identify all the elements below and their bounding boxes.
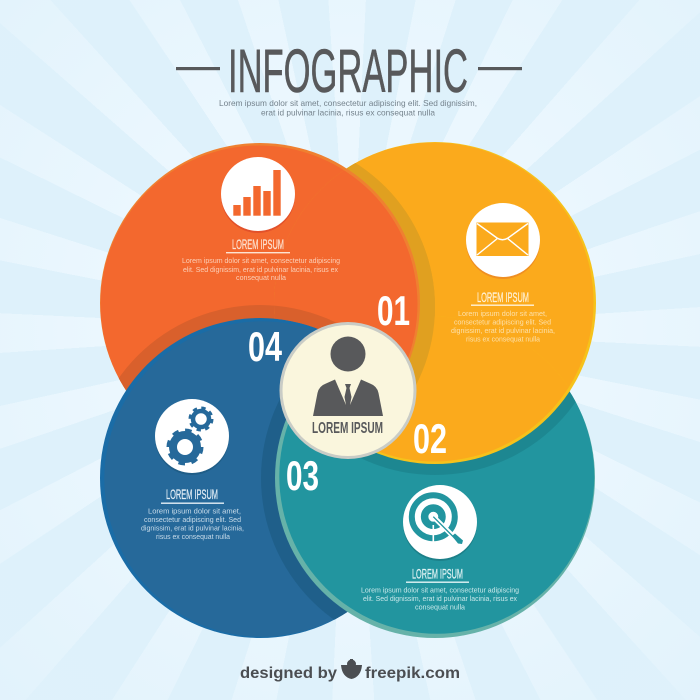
heading: LOREM IPSUM xyxy=(477,289,529,305)
icon: bar chart xyxy=(221,157,295,233)
body text: Lorem ipsum dolor sit amet, xyxy=(148,506,241,516)
number 02: 02 xyxy=(413,415,447,462)
body text xyxy=(361,586,519,612)
panel: center person badge xyxy=(280,322,416,459)
orange circle shadow on yellow xyxy=(346,163,356,168)
yellow overlap on teal xyxy=(361,318,576,475)
body text xyxy=(451,309,555,344)
body text: Lorem ipsum dolor sit amet, xyxy=(458,309,547,318)
heading: LOREM IPSUM xyxy=(166,486,218,502)
panel: yellow step 02 xyxy=(413,203,555,462)
panel: orange step 01 xyxy=(182,157,410,334)
body text: risus ex consequat nulla xyxy=(156,532,230,541)
title: INFOGRAPHIC xyxy=(228,37,468,105)
center label: LOREM IPSUM xyxy=(312,420,383,437)
teal circle shadow on blue xyxy=(261,400,348,620)
orange overlap on yellow xyxy=(274,163,435,384)
body text: dignissim, erat id pulvinar lacinia, xyxy=(141,524,244,532)
body text xyxy=(182,256,340,282)
blue circle base xyxy=(100,318,420,638)
body text xyxy=(141,506,244,541)
teal circle base xyxy=(275,318,595,638)
circle diagram xyxy=(87,131,609,652)
body text: dignissim, erat id pulvinar lacinia, xyxy=(451,326,555,335)
body text: consequat nulla xyxy=(415,602,465,612)
footer credit: designed by xyxy=(240,665,337,682)
body text: consectetur adipiscing elit. Sed xyxy=(144,515,241,524)
number 01: 01 xyxy=(377,287,410,334)
icon: businessman xyxy=(313,336,383,416)
icon: freepik logo xyxy=(341,659,362,679)
blue circle shadow on orange xyxy=(118,305,274,390)
subtitle xyxy=(219,98,477,118)
number 03: 03 xyxy=(286,452,319,499)
icon: envelope xyxy=(466,203,540,279)
icon: gears xyxy=(155,399,229,475)
footer credit: freepik.com xyxy=(365,665,460,682)
icon: target with arrow xyxy=(403,485,477,561)
number 04: 04 xyxy=(248,323,282,370)
panel: blue step 04 xyxy=(141,323,282,541)
subtitle: Lorem ipsum dolor sit amet, consectetur adipiscing elit. Sed dignissim, xyxy=(219,98,477,108)
body text: risus ex consequat nulla xyxy=(466,334,540,344)
yellow circle base xyxy=(274,142,596,464)
title xyxy=(176,37,522,105)
body text: Lorem ipsum dolor sit amet, consectetur adipiscing xyxy=(361,586,519,594)
body text: elit. Sed dignissim, erat id pulvinar lacinia, risus ex xyxy=(183,265,338,274)
subtitle: erat id pulvinar lacinia, risus ex consequat nulla xyxy=(261,108,435,118)
footer credit xyxy=(240,659,460,682)
heading: LOREM IPSUM xyxy=(412,566,463,582)
body text: consequat nulla xyxy=(236,273,286,282)
panel: teal step 03 xyxy=(286,452,519,612)
orange circle base xyxy=(100,143,420,463)
body text: Lorem ipsum dolor sit amet, consectetur adipiscing xyxy=(182,256,340,265)
body text: elit. Sed dignissim, erat id pulvinar lacinia, risus ex xyxy=(363,594,517,603)
heading: LOREM IPSUM xyxy=(232,236,284,252)
body text: consectetur adipiscing elit. Sed xyxy=(454,318,551,326)
